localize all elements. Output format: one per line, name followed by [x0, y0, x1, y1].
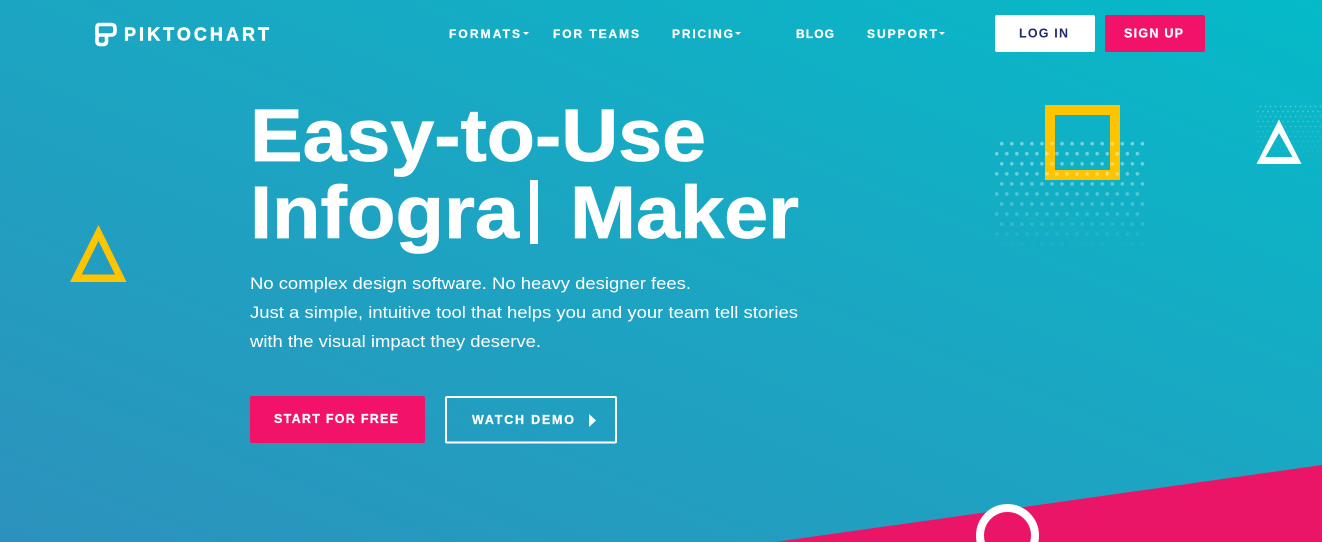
- description text: No complex design software. No heavy designer fees.: [250, 274, 691, 293]
- dot grid behind square: [995, 142, 1144, 236]
- button: watch demo: [446, 397, 616, 442]
- button: watch demo: WATCH DEMO: [472, 413, 574, 427]
- icon: play arrow: [589, 414, 596, 427]
- nav item: pricing: PRICING: [672, 27, 733, 41]
- button: log in: LOG IN: [1019, 26, 1068, 40]
- icon: yellow triangle: [70, 225, 126, 282]
- dot grid top right: [1256, 106, 1322, 157]
- button: start for free: START FOR FREE: [274, 412, 398, 426]
- heading: Infogra: [250, 171, 520, 254]
- button: log in: [995, 15, 1095, 52]
- description text: with the visual impact they deserve.: [249, 332, 541, 351]
- heading: [250, 94, 799, 254]
- description text: Just a simple, intuitive tool that helps you and your team tell stories: [250, 303, 798, 322]
- logo: [97, 24, 269, 44]
- logo wordmark: PIKTOCHART: [124, 24, 269, 44]
- nav item: formats: FORMATS: [449, 27, 520, 41]
- description text: [249, 274, 798, 351]
- nav item: for teams: FOR TEAMS: [553, 27, 639, 41]
- icon: logo mark: [97, 24, 115, 44]
- button: sign up: [1105, 15, 1205, 52]
- icon: yellow square outline: [1050, 110, 1115, 175]
- nav item: support: SUPPORT: [867, 27, 938, 41]
- nav item: blog: BLOG: [796, 27, 834, 41]
- button: start for free: [250, 396, 425, 443]
- navigation: [449, 27, 945, 41]
- icon: white triangle: [1256, 120, 1302, 164]
- heading: Easy-to-Use: [250, 94, 706, 177]
- white circle outline: [980, 508, 1035, 542]
- button: sign up: SIGN UP: [1124, 26, 1183, 40]
- pink diagonal band: [775, 465, 1322, 542]
- heading: Maker: [570, 171, 799, 254]
